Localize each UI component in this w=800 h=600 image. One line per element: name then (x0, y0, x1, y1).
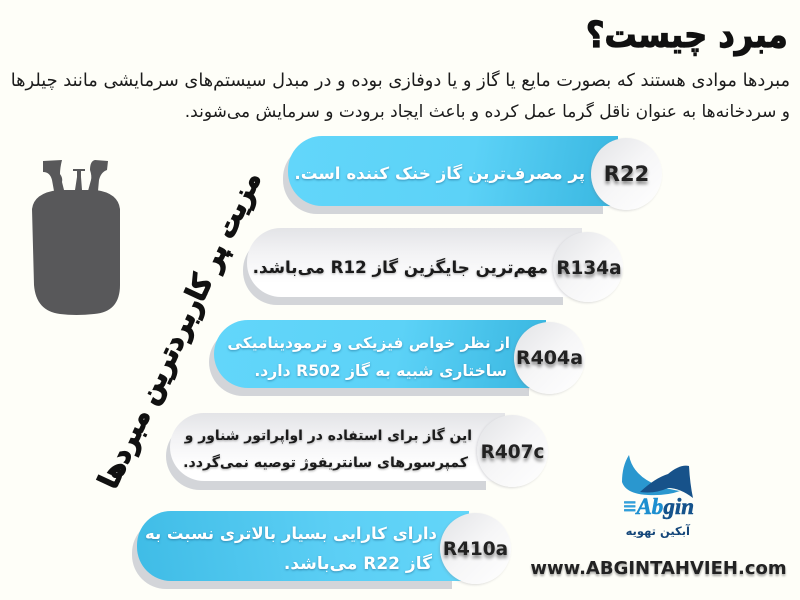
icon: refrigerant cylinder (32, 160, 120, 315)
rotated heading: مزیت پر کاربردترین مبردها (92, 166, 267, 493)
card text line 1: این گاز برای استفاده در اواپراتور شناور و (185, 428, 472, 444)
card: R134a (243, 228, 623, 305)
card body (137, 511, 469, 581)
card text line 1: دارای کارایی بسیار بالاتری نسبت به (145, 524, 437, 543)
logo wordmark: ≡Abgin (623, 494, 694, 519)
card body (247, 228, 582, 297)
code label: R404a (516, 347, 583, 369)
title: مبرد چیست؟ (586, 15, 788, 56)
card text line 2: کمپرسورهای سانتریفوژ توصیه نمی‌گردد. (183, 455, 468, 471)
card base (132, 519, 452, 589)
card text line 1: از نظر خواص فیزیکی و ترمودینامیکی (227, 334, 510, 352)
code label: R22 (604, 162, 649, 186)
card: R407c (166, 413, 546, 490)
card: R22 (283, 136, 657, 214)
card base (283, 144, 603, 214)
card body (288, 136, 618, 206)
logo persian name: آبکین تهویه (626, 524, 690, 538)
card text line 2: گاز R22 می‌باشد. (284, 554, 432, 574)
card body (214, 320, 546, 388)
intro line 2: و سردخانه‌ها به عنوان ناقل گرما عمل کرده و باعث ایجاد برودت و سرمایش می‌شوند. (185, 102, 790, 122)
card text: پر مصرف‌ترین گاز خنک کننده است. (294, 163, 585, 183)
card body (170, 413, 505, 481)
intro text (11, 70, 790, 122)
logo (622, 455, 694, 538)
code circle (553, 232, 623, 302)
code label: R407c (481, 442, 544, 463)
code circle (514, 322, 585, 394)
card base (243, 236, 563, 305)
icon: logo wave (622, 455, 693, 498)
intro line 1: مبردها موادی هستند که بصورت مایع یا گاز و یا دوفازی بوده و در مبدل سیستم‌های سرمایشی مانند چیلرها (11, 70, 790, 91)
card text: مهم‌ترین جایگزین گاز R12 می‌باشد. (253, 257, 548, 277)
card: R404a (209, 320, 584, 396)
code circle (440, 513, 511, 584)
code label: R134a (556, 258, 622, 279)
code circle (477, 415, 548, 487)
code circle (591, 138, 662, 210)
card base (166, 422, 486, 490)
website url: www.ABGINTAHVIEH.com (530, 558, 787, 579)
code label: R410a (443, 539, 508, 560)
card text line 2: ساختاری شبیه به گاز R502 دارد. (254, 362, 507, 380)
card: R410a (132, 511, 510, 589)
card base (209, 328, 529, 396)
